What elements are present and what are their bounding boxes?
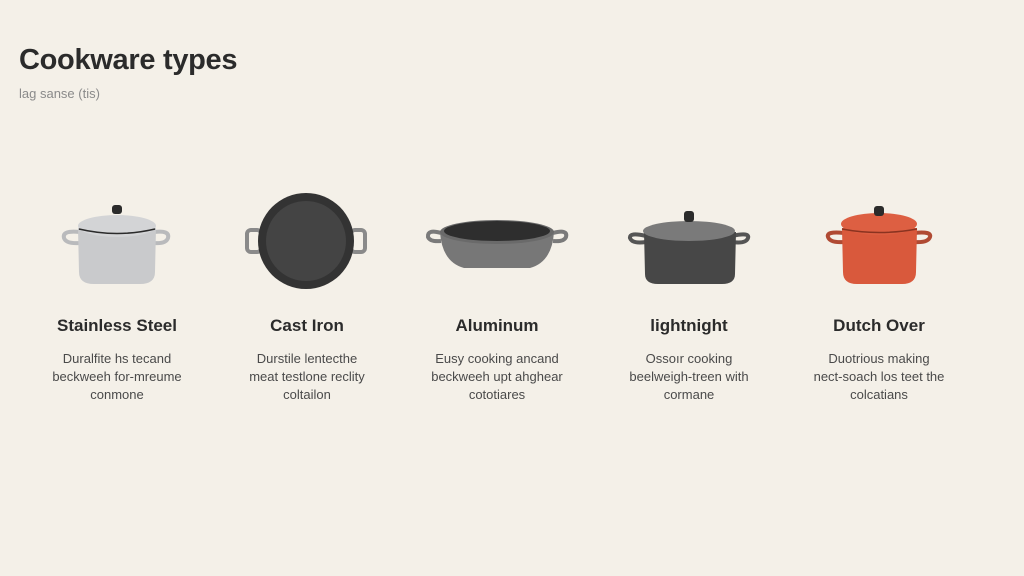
icon: stainless steel pot <box>64 205 168 284</box>
panel: lightnight <box>629 316 749 402</box>
panel: dutch oven <box>814 316 944 402</box>
panel: aluminum: beckweeh upt ahghear <box>431 369 563 384</box>
panel: dutch oven: colcatians <box>850 387 908 402</box>
panel: lightnight: cormane <box>664 387 714 402</box>
panel: cast iron: meat testlone reclity <box>249 369 365 384</box>
icon: lightweight pot <box>630 211 748 284</box>
panel: dutch oven: nect-soach los teet the <box>814 369 944 384</box>
panel: cast iron: Cast Iron <box>270 316 344 335</box>
panel: stainless steel: Duralfite hs tecand <box>63 351 171 366</box>
title: Cookware types <box>19 44 237 76</box>
panel: lightnight: beelweigh-treen with <box>629 369 749 384</box>
panel: aluminum: Eusy cooking ancand <box>435 351 559 366</box>
panel: stainless steel: Stainless Steel <box>57 316 177 335</box>
panel: stainless steel: conmone <box>90 387 144 402</box>
icon: dutch oven <box>828 206 930 284</box>
panel: aluminum: Aluminum <box>455 316 539 335</box>
subtitle: lag sanse (tis) <box>19 86 100 101</box>
panel: dutch oven: Dutch Over <box>833 316 925 335</box>
panel: aluminum: cototiares <box>469 387 525 402</box>
icon: aluminum pan <box>428 220 566 268</box>
panel: cast iron: coltailon <box>283 387 331 402</box>
panel: dutch oven: Duotrious making <box>828 351 930 366</box>
panel: lightnight: lightnight <box>650 316 728 335</box>
panel: cast iron <box>249 316 365 402</box>
panel: aluminum <box>431 316 563 402</box>
panel: lightnight: Ossoır cooking <box>646 351 732 366</box>
panel: stainless steel: beckweeh for-mreume <box>52 369 182 384</box>
icon: cast iron pan <box>247 193 365 289</box>
panel: cast iron: Durstile lentecthe <box>257 351 357 366</box>
panel: stainless steel <box>52 316 182 402</box>
